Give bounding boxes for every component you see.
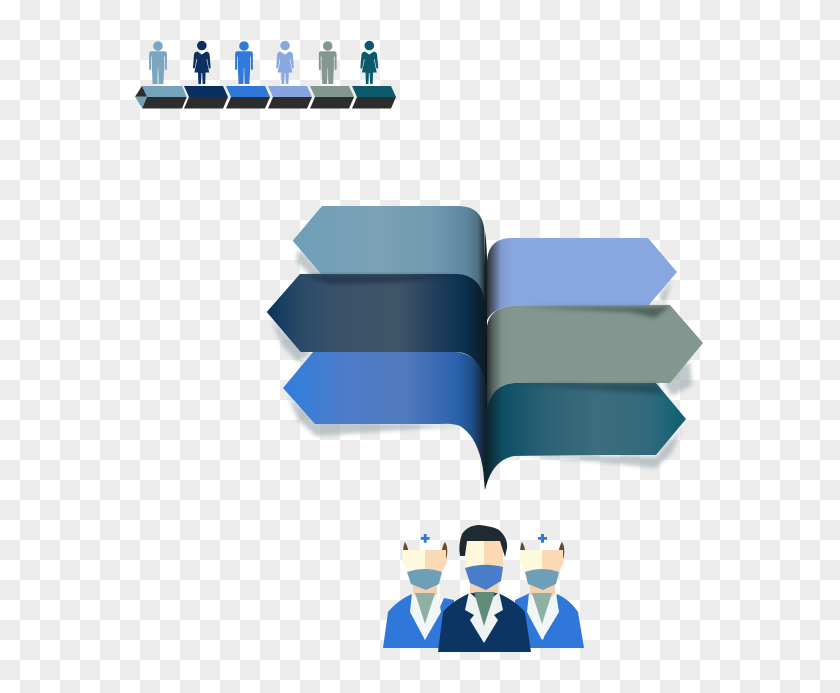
ribbon: light blue, upper left <box>293 206 484 302</box>
icon: woman, teal <box>360 41 378 84</box>
ribbon: grey, middle right <box>487 305 703 410</box>
ribbon: blue, lower left <box>283 352 486 490</box>
ribbon shadows <box>272 250 692 468</box>
spine <box>482 232 487 490</box>
ribbon arrows diagram <box>267 206 703 490</box>
right doctor <box>515 534 584 648</box>
ribbon: periwinkle, upper right <box>487 238 677 320</box>
icon: man, light blue <box>149 41 167 84</box>
people timeline <box>135 41 396 108</box>
icon: medical cross <box>421 534 430 543</box>
doctors group <box>383 525 584 652</box>
centre doctor <box>438 525 531 652</box>
fold shadow on teal ribbon <box>520 384 664 394</box>
ribbon: teal, lower right <box>485 383 686 490</box>
fold shadow on grey ribbon <box>520 306 670 318</box>
icon: man, grey <box>319 41 337 84</box>
fold shadow on navy ribbon <box>305 275 460 284</box>
icon: woman, periwinkle <box>276 41 294 84</box>
arrow bar <box>135 86 396 108</box>
icon: medical cross <box>538 534 547 543</box>
ribbon: navy, middle left <box>267 274 485 384</box>
icon: man, blue <box>235 41 253 84</box>
icon: woman, navy <box>193 41 211 84</box>
left doctor <box>383 534 454 648</box>
